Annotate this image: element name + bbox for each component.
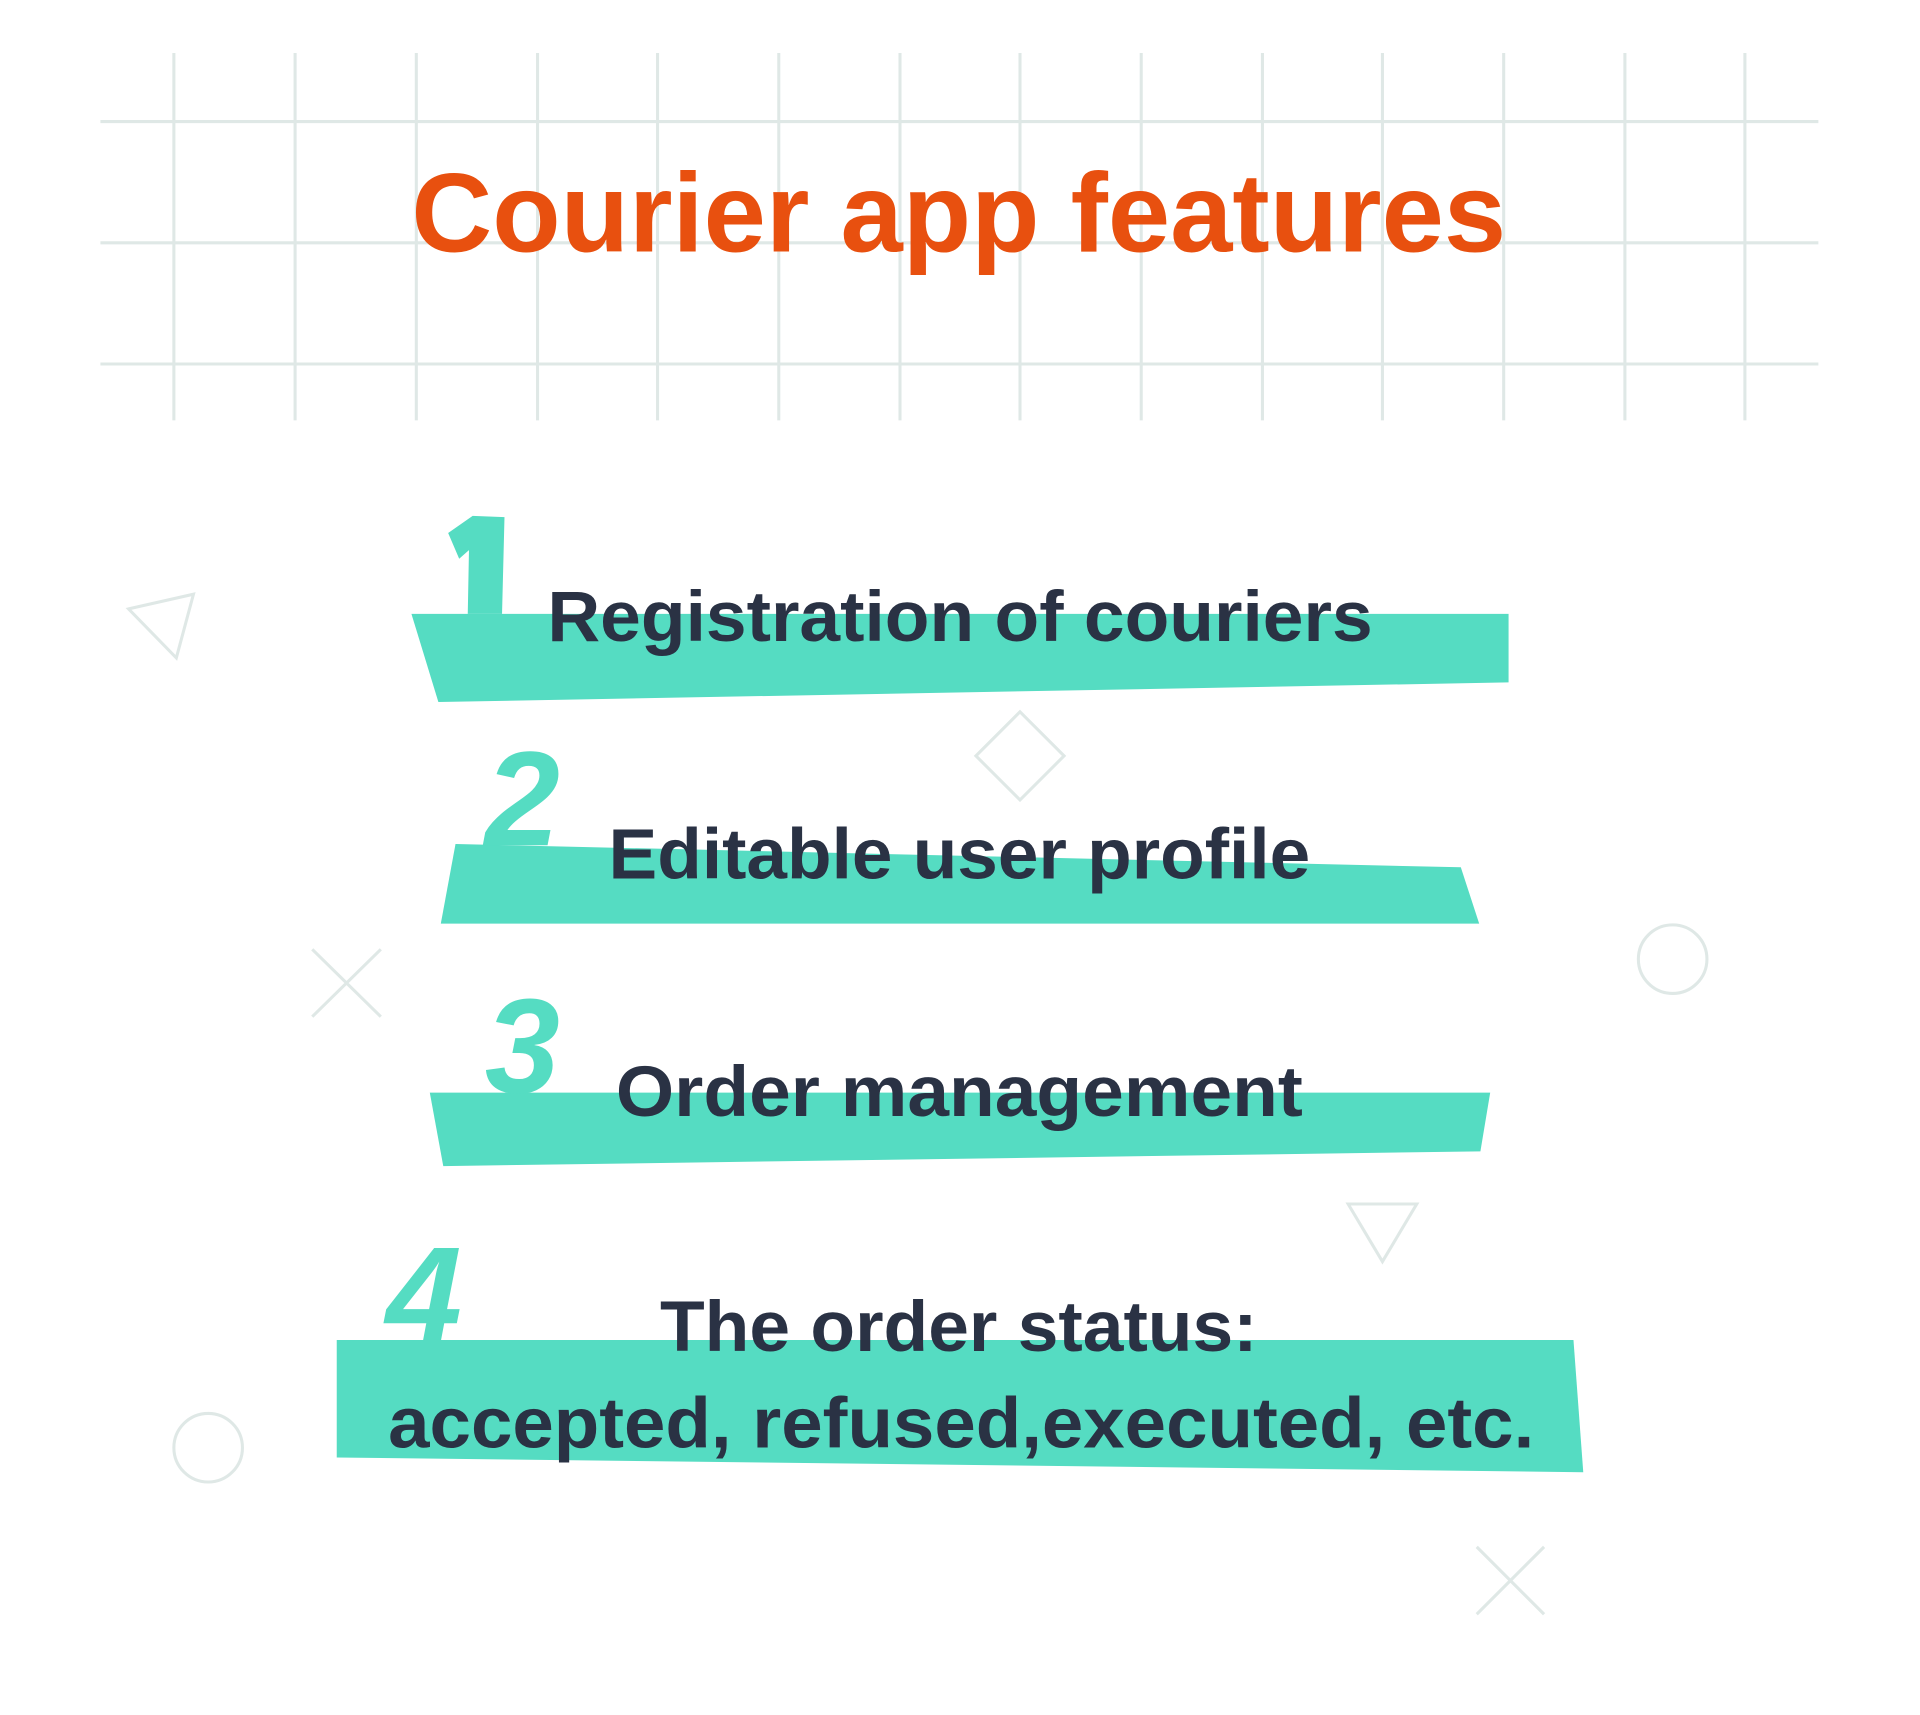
feature 1 xyxy=(411,516,1509,702)
feature 1: Registration of couriers xyxy=(547,578,1373,657)
number 4: 4 xyxy=(383,1219,462,1372)
feature 4 xyxy=(337,1219,1583,1472)
feature 2 xyxy=(441,723,1479,924)
title: Courier app features xyxy=(411,149,1506,275)
feature 4: accepted, refused,executed, etc. xyxy=(388,1385,1534,1464)
feature 4: The order status: xyxy=(660,1288,1258,1367)
number 1 xyxy=(448,516,504,614)
number 3: 3 xyxy=(485,971,560,1122)
number 2: 2 xyxy=(482,723,560,874)
feature 3: Order management xyxy=(616,1053,1303,1132)
decorative shapes xyxy=(129,594,1707,1614)
feature 3 xyxy=(430,971,1490,1166)
feature 2: Editable user profile xyxy=(609,815,1310,894)
